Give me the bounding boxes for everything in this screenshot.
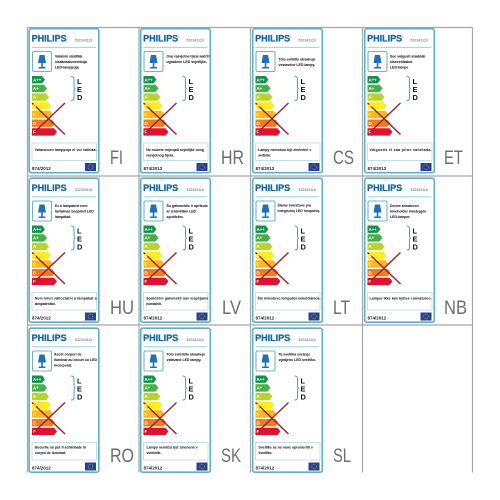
energy scale letters: D: [33, 121, 36, 126]
card: CS: [253, 29, 322, 173]
energy scale letters: A: [368, 244, 372, 249]
LED label: L: [300, 77, 306, 86]
energy scale letters: B: [256, 403, 260, 408]
regulation number: 874/2012: [32, 166, 51, 171]
LED label: E: [188, 234, 194, 244]
LED label: E: [77, 384, 82, 394]
statement text: Toto svietidlo obsahuje: [166, 352, 205, 356]
statement text: Denne armaturen: [390, 204, 419, 208]
energy scale letters: B: [33, 103, 36, 108]
energy scale letters: B: [368, 103, 372, 108]
language code: SL: SL: [333, 445, 351, 467]
card: SL: [253, 328, 322, 472]
language code: LV: LV: [222, 297, 241, 319]
logo: PHILIPS: PHILIPS: [367, 34, 402, 44]
energy scale letters: A++: [256, 77, 265, 82]
LED label: L: [77, 226, 82, 236]
regulation number: 874/2012: [368, 166, 387, 171]
regulation number: 874/2012: [256, 316, 275, 320]
notice text: Valgustis ei saa pirne vahetada.: [370, 148, 432, 152]
regulation number: 874/2012: [144, 466, 163, 470]
product code: 532343116: [410, 188, 428, 192]
statement text: [278, 352, 316, 362]
energy scale letters: A++: [368, 77, 377, 82]
logo: PHILIPS: PHILIPS: [143, 183, 178, 193]
energy scale letters: C: [33, 262, 37, 267]
energy scale letters: F: [144, 130, 148, 134]
logo: PHILIPS: PHILIPS: [32, 183, 67, 193]
LED label: L: [188, 77, 194, 86]
energy scale letters: [144, 77, 153, 134]
regulation number: 874/2012: [256, 466, 275, 470]
energy scale letters: A+: [33, 86, 39, 91]
notice text: svietidle.: [146, 451, 162, 455]
statement text: Ez a lámpatest nem: [55, 204, 87, 208]
LED label: L: [77, 376, 82, 386]
energy scale letters: C: [144, 262, 148, 267]
card: RO: [29, 328, 99, 472]
logo: PHILIPS: PHILIPS: [32, 34, 67, 44]
LED label: D: [77, 392, 83, 402]
product code: 532343116: [186, 338, 204, 342]
regulation number: 874/2012: [368, 316, 387, 320]
energy scale letters: F: [33, 130, 36, 134]
LED label: [188, 376, 194, 402]
energy scale letters: A: [33, 95, 37, 100]
energy scale letters: D: [144, 420, 148, 425]
notice text: [35, 296, 97, 306]
card: LT: [253, 178, 322, 322]
energy scale letters: A+: [33, 236, 39, 240]
energy scale letters: B: [144, 103, 148, 108]
energy scale letters: F: [256, 429, 260, 434]
LED label: [77, 376, 83, 402]
energy scale letters: B: [368, 253, 372, 258]
energy scale letters: A+: [33, 386, 39, 390]
statement text: [55, 204, 94, 219]
energy scale letters: D: [256, 121, 260, 126]
LED label: E: [77, 85, 82, 94]
LED label: L: [412, 226, 418, 236]
LED label: D: [300, 242, 306, 252]
energy scale letters: D: [144, 121, 148, 126]
energy scale letters: A: [144, 244, 148, 249]
energy scale letters: A: [256, 394, 260, 399]
product code: 532343116: [298, 188, 316, 192]
card: HU: [29, 178, 99, 322]
energy scale letters: C: [368, 262, 372, 267]
statement text: [278, 202, 320, 213]
notice text: Lampy nemohou být změněné v: [258, 148, 311, 152]
notice text: Nem lehet változtatni a lámpákat a: [35, 296, 97, 300]
notice text: Lamper ikke kan byttes i armaturen.: [370, 296, 432, 300]
energy scale letters: A+: [256, 86, 263, 91]
LED label: D: [77, 93, 83, 102]
energy scale letters: [256, 227, 265, 284]
statement text: [166, 352, 205, 362]
energy scale letters: [144, 377, 153, 434]
regulation number: 874/2012: [32, 316, 51, 320]
energy scale letters: [368, 227, 377, 284]
energy scale letters: A++: [368, 227, 377, 232]
LED label: E: [300, 85, 306, 94]
notice text: Becurile nu pot fi schimbate în: [35, 446, 86, 450]
statement text: [166, 203, 208, 219]
LED label: [300, 77, 306, 102]
LED label: [188, 77, 194, 102]
energy scale letters: F: [33, 429, 36, 434]
card: LV: [141, 178, 210, 322]
product code: 532343116: [75, 38, 92, 42]
energy scale letters: A+: [144, 86, 151, 91]
statement text: Šo gaismeklis ir aprīkots: [166, 203, 208, 208]
energy scale letters: A++: [33, 377, 42, 382]
LED label: E: [77, 234, 82, 244]
language code: RO: RO: [110, 445, 134, 467]
statement text: lámpákat.: [55, 215, 71, 219]
language code: ET: ET: [444, 147, 463, 169]
energy scale letters: A: [144, 394, 148, 399]
energy scale letters: A+: [256, 236, 263, 240]
energy scale letters: C: [144, 412, 148, 417]
energy scale letters: D: [144, 270, 148, 275]
energy scale letters: A++: [256, 227, 265, 232]
notice text: Spuldzēm gaismekli nav iespējams: [146, 296, 208, 300]
logo: PHILIPS: PHILIPS: [255, 333, 290, 343]
energy scale letters: A++: [144, 377, 153, 382]
statement text: See valgusti sisaldab: [390, 54, 425, 58]
notice text: Valaisimen lamppuja ei voi vaihtaa.: [35, 148, 97, 152]
logo: PHILIPS: PHILIPS: [143, 333, 178, 343]
product code: 532343116: [186, 38, 204, 42]
statement text: spuldzēm.: [166, 215, 184, 219]
energy scale letters: B: [144, 403, 148, 408]
card: FI: [29, 29, 99, 173]
energy scale letters: [33, 77, 42, 134]
product code: 532343116: [186, 188, 204, 192]
statement text: Ta svetilka vsebuje: [278, 352, 310, 356]
energy scale letters: A+: [144, 386, 151, 390]
energy scale letters: [33, 377, 42, 434]
regulation number: 874/2012: [256, 166, 275, 171]
energy scale letters: A++: [256, 377, 265, 382]
card: SK: [141, 328, 210, 472]
language code: NB: NB: [444, 297, 467, 319]
regulation number: 874/2012: [144, 166, 163, 171]
notice text: corpul de iluminat.: [35, 451, 66, 455]
statement text: iluminat au becuri cu LED: [54, 358, 97, 362]
notice text: Svetilke se ne more spremeniti v: [258, 446, 313, 450]
LED label: D: [77, 242, 83, 252]
energy scale letters: C: [256, 112, 260, 117]
energy scale letters: A: [256, 95, 260, 100]
product code: 532343116: [298, 38, 316, 42]
LED label: E: [188, 85, 194, 94]
language code: FI: FI: [110, 147, 123, 169]
notice text: Ne možete mijenjati svjetiljke ovog: [146, 148, 204, 152]
language code: SK: SK: [221, 445, 241, 467]
energy scale letters: [144, 227, 153, 284]
energy scale letters: A+: [368, 236, 375, 240]
LED label: E: [300, 384, 306, 394]
energy scale letters: F: [368, 130, 372, 134]
energy scale letters: [33, 227, 42, 284]
statement text: [390, 204, 426, 219]
LED label: E: [412, 234, 418, 244]
statement text: inneholder innebygde: [390, 210, 426, 214]
energy scale letters: A: [144, 95, 148, 100]
card: NB: [365, 178, 434, 322]
energy scale letters: D: [256, 270, 260, 275]
regulation number: 874/2012: [144, 316, 163, 320]
statement text: integruotų LED lempučių.: [278, 209, 320, 213]
energy scale letters: A: [368, 95, 372, 100]
logo: PHILIPS: PHILIPS: [255, 34, 290, 44]
notice text: Šio šviestuvo lemputės nekeičiamos.: [258, 296, 321, 300]
energy scale letters: F: [256, 130, 260, 134]
statement text: [54, 352, 97, 368]
grid lines: [28, 28, 472, 472]
energy scale letters: A++: [144, 227, 153, 232]
statement text: LED-lamper.: [390, 215, 410, 219]
statement text: Ova rasvjetna tijela sadrži: [166, 54, 210, 58]
energy scale letters: D: [368, 121, 372, 126]
regulation number: 874/2012: [32, 466, 51, 470]
energy scale letters: A+: [256, 386, 263, 390]
product code: 532343116: [75, 188, 92, 192]
energy scale letters: A: [33, 394, 37, 399]
statement text: ar iebūvētām LED: [166, 210, 197, 214]
statement text: [390, 54, 425, 70]
energy scale letters: C: [368, 112, 372, 117]
card: HR: [141, 29, 210, 173]
notice text: svítidle.: [258, 153, 271, 157]
energy scale letters: D: [368, 270, 372, 275]
logo: PHILIPS: PHILIPS: [32, 333, 67, 343]
LED label: D: [188, 93, 194, 102]
energy scale letters: C: [256, 262, 260, 267]
LED label: D: [188, 392, 194, 402]
notice text: [146, 296, 208, 306]
LED label: E: [412, 85, 418, 94]
energy scale letters: F: [33, 279, 36, 284]
LED label: L: [188, 226, 194, 236]
LED label: L: [188, 376, 194, 386]
energy scale letters: A++: [33, 77, 42, 82]
card: ET: [365, 29, 434, 173]
statement text: [55, 54, 87, 70]
logo: PHILIPS: PHILIPS: [367, 183, 402, 193]
energy scale letters: D: [33, 420, 36, 425]
notice text: Lampy nemôžu byť zmenené v: [146, 446, 198, 450]
LED label: D: [412, 242, 418, 252]
LED label: E: [300, 234, 306, 244]
LED label: L: [300, 376, 306, 386]
language code: HR: HR: [221, 147, 244, 169]
statement text: Valaisin sisältää: [55, 54, 82, 58]
logo: PHILIPS: PHILIPS: [143, 34, 178, 44]
energy scale letters: B: [33, 253, 36, 258]
language code: LT: LT: [333, 297, 350, 319]
statement text: sisäänrakennettuja: [55, 60, 87, 64]
LED label: [77, 226, 83, 252]
notice text: rasvjetnog tijela.: [146, 153, 174, 157]
LED label: L: [412, 77, 418, 86]
energy scale letters: C: [33, 412, 37, 417]
energy scale letters: C: [256, 412, 260, 417]
energy scale letters: F: [144, 279, 148, 284]
statement text: Acest corpuri de: [54, 352, 82, 356]
notice text: [258, 446, 313, 455]
energy scale letters: D: [256, 420, 260, 425]
energy scale letters: [256, 77, 265, 134]
LED label: L: [77, 77, 82, 86]
energy scale letters: C: [144, 112, 148, 117]
language code: HU: HU: [110, 297, 134, 319]
notice text: svetilko.: [258, 451, 273, 455]
energy scale letters: B: [33, 403, 36, 408]
LED label: D: [300, 93, 306, 102]
product code: 532343116: [410, 38, 428, 42]
energy scale letters: F: [256, 279, 260, 284]
statement text: vestavěné LED lampy.: [278, 63, 315, 67]
energy scale letters: A+: [144, 236, 151, 240]
energy scale letters: C: [33, 112, 37, 117]
statement text: vstavané LED lampy.: [166, 358, 201, 362]
energy scale letters: [368, 77, 377, 134]
LED label: D: [300, 392, 306, 402]
energy scale letters: [256, 377, 265, 434]
statement text: [278, 58, 315, 67]
energy scale letters: A+: [368, 86, 375, 91]
statement text: Toto svítidlo obsahuje: [278, 58, 315, 62]
LED label: E: [188, 384, 194, 394]
notice text: lámpatestbe.: [35, 302, 56, 306]
LED label: [412, 77, 418, 102]
energy scale letters: F: [144, 429, 148, 434]
LED label: D: [412, 93, 418, 102]
notice text: [146, 446, 198, 455]
statement text: sisseehitatud: [390, 60, 412, 64]
statement text: LED-lamppuja.: [55, 66, 80, 70]
notice text: [35, 446, 86, 455]
logo: PHILIPS: PHILIPS: [255, 183, 290, 193]
statement text: ugrađene LED svjetiljke.: [166, 60, 207, 64]
statement text: [166, 54, 210, 64]
LED label: D: [188, 242, 194, 252]
energy scale letters: B: [144, 253, 148, 258]
LED label: L: [300, 226, 306, 236]
language code: CS: CS: [333, 147, 354, 169]
product code: 532343116: [75, 338, 92, 342]
product code: 532343116: [298, 338, 316, 342]
LED label: [300, 226, 306, 252]
energy scale letters: D: [33, 270, 36, 275]
statement text: vgrajeno LED svetilko.: [278, 358, 316, 362]
statement text: incorporat.: [54, 364, 72, 368]
energy scale letters: B: [256, 103, 260, 108]
statement text: LED-lampe: [390, 66, 408, 70]
statement text: Šiame šviestuve yra: [278, 202, 311, 208]
LED label: [412, 226, 418, 252]
statement text: tartalmaz beépített LED: [55, 210, 94, 214]
LED label: [300, 376, 306, 402]
energy scale letters: A++: [144, 77, 153, 82]
notice text: [258, 148, 311, 157]
energy scale letters: A: [33, 244, 37, 249]
notice text: nomainīt.: [146, 302, 162, 306]
LED label: [77, 77, 83, 102]
energy scale letters: F: [368, 279, 372, 284]
notice text: [146, 148, 204, 157]
LED label: [188, 226, 194, 252]
energy scale letters: A++: [33, 227, 42, 232]
energy scale letters: A: [256, 244, 260, 249]
energy scale letters: B: [256, 253, 260, 258]
